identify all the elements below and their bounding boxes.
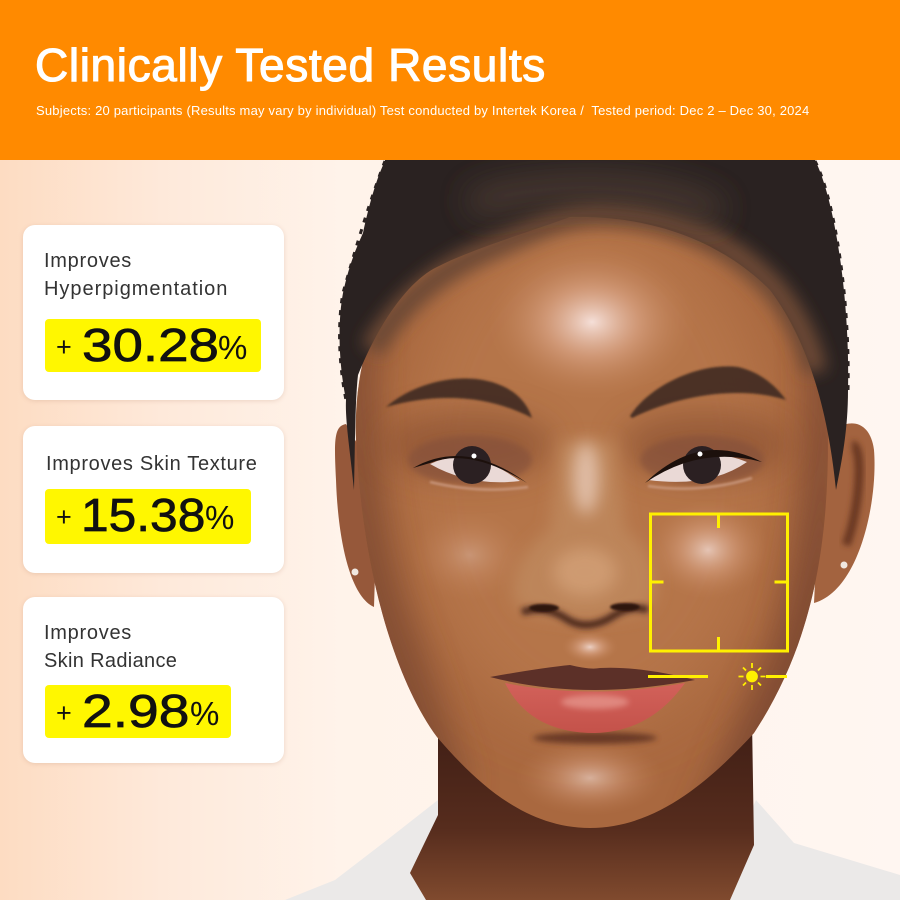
icon: sun <box>738 663 766 690</box>
eye: left <box>408 436 532 490</box>
ear: right <box>814 423 875 603</box>
brown hairline band <box>372 214 815 372</box>
card: skin texture <box>23 426 284 573</box>
nose <box>512 440 656 625</box>
hair <box>340 160 848 490</box>
shirt <box>285 800 900 900</box>
face <box>356 217 828 828</box>
eye socket shading <box>385 411 555 479</box>
card: skin radiance: Skin Radiance <box>44 650 177 672</box>
eyebrow: right <box>630 366 786 418</box>
card: skin texture: % <box>205 499 234 536</box>
card: skin texture: 15.38 <box>81 489 205 541</box>
chin highlight <box>534 750 646 806</box>
card: skin texture: Improves Skin Texture <box>46 453 258 475</box>
subtitle: Subjects: 20 participants (Results may vary by individual) Test conducted by Intertek Korea / Tested period: Dec 2 – Dec 30, 2024 <box>36 103 809 118</box>
eye: right <box>640 436 764 489</box>
card: skin radiance <box>23 597 284 763</box>
portrait photo illustration <box>286 160 900 900</box>
analysis overlay <box>648 512 789 690</box>
title: Clinically Tested Results <box>35 39 546 91</box>
philtrum highlight <box>568 635 612 660</box>
card: hyperpigmentation: 30.28 <box>82 319 219 371</box>
card: skin radiance: 2.98 <box>82 685 189 737</box>
eyebrow: left <box>386 378 532 418</box>
forehead highlight <box>510 260 675 384</box>
cheek highlights <box>662 516 755 588</box>
card: skin radiance: % <box>190 695 219 732</box>
card: skin radiance: Improves <box>44 622 132 644</box>
ear: left <box>335 424 378 607</box>
face side shading <box>356 345 474 776</box>
card: hyperpigmentation: Hyperpigmentation <box>44 278 228 300</box>
neck <box>410 720 754 900</box>
card: hyperpigmentation: % <box>218 329 247 366</box>
card: hyperpigmentation: + <box>56 332 72 362</box>
card: hyperpigmentation: Improves <box>44 250 132 272</box>
header banner <box>0 0 900 160</box>
card: skin radiance: + <box>56 698 72 728</box>
card: hyperpigmentation <box>23 225 284 400</box>
card: skin texture: + <box>56 502 72 532</box>
mouth <box>490 665 695 744</box>
